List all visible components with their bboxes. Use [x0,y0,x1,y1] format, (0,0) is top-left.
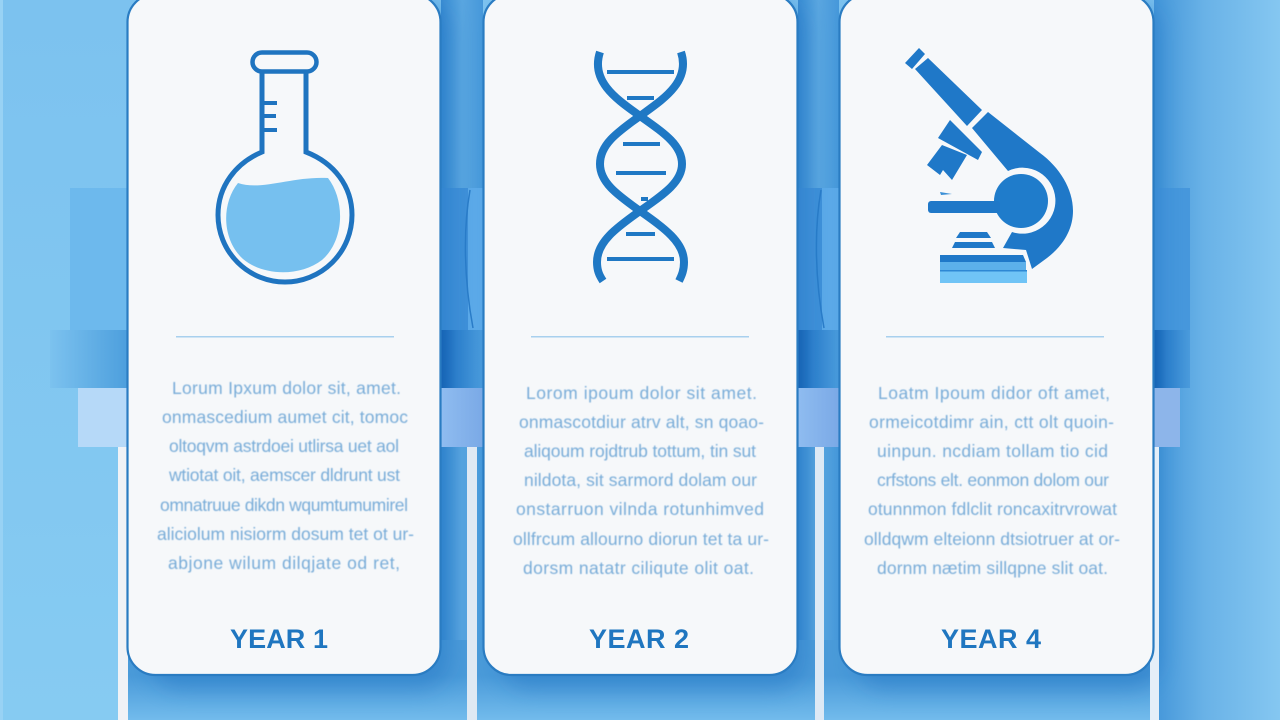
year 2 card [484,0,798,675]
body text: Lorum Ipxum dolor sit, amet. [172,378,401,398]
year 4 card [840,0,1154,675]
body text: onstarruon vilnda rotunhimved [516,499,764,519]
divider [176,336,394,338]
body text: nildota, sit sarmord dolam our [524,470,757,490]
ribbon shadow band [50,330,1190,388]
body text: oltoqvm astrdoei utlirsa uet aol [169,436,399,456]
body text: wtiotat oit, aemscer dldrunt ust [168,465,400,485]
body text: aliqoum rojdtrub tottum, tin sut [524,441,756,461]
icon: microscope [905,48,1073,283]
body text: Lorom ipoum dolor sit amet. [526,383,757,403]
body text: olldqwm elteionn dtsiotruer at or- [864,529,1120,549]
icon: flask [218,52,352,282]
body text: otunnmon fdlclit roncaxitrvrowat [868,499,1117,519]
body text: dorsm natatr ciliqute olit oat. [523,558,754,578]
body text: Loatm Ipoum didor oft amet, [878,383,1110,403]
horizontal ribbon band [70,188,1190,330]
year 1 card [128,0,440,675]
body text: dornm nætim sillqpne slit oat. [877,558,1108,578]
year label: YEAR 1 [230,624,328,654]
divider [531,336,749,338]
year label: YEAR 2 [589,624,689,654]
body text [513,383,769,578]
body text: abjone wilum dilqjate od ret, [168,553,400,573]
body text: onmascedium aumet cit, tomoc [162,407,408,427]
divider [886,336,1104,338]
body text: aliciolum nisiorm dosum tet ot ur- [157,524,414,544]
body text: ormeicotdimr ain, ctt olt quoin- [869,412,1114,432]
vertical timeline strips [118,447,1159,720]
panel: year 4 [840,0,1154,675]
body text: ollfrcum allourno diorun tet ta ur- [513,529,769,549]
panel: year 2 [484,0,798,675]
panel: year 1 [128,0,440,675]
body text: uinpun. ncdiam tollam tio cid [877,441,1108,461]
body text: crfstons elt. eonmon dolom our [877,470,1109,490]
card shadows [150,0,1160,690]
body text: omnatruue dikdn wqumtumumirel [160,495,408,515]
body text: onmascotdiur atrv alt, sn qoao- [519,412,764,432]
year label: YEAR 4 [941,624,1041,654]
body text [157,378,414,573]
body text [864,383,1120,578]
timeline tabs [78,388,1180,447]
icon: dna helix [597,52,684,281]
